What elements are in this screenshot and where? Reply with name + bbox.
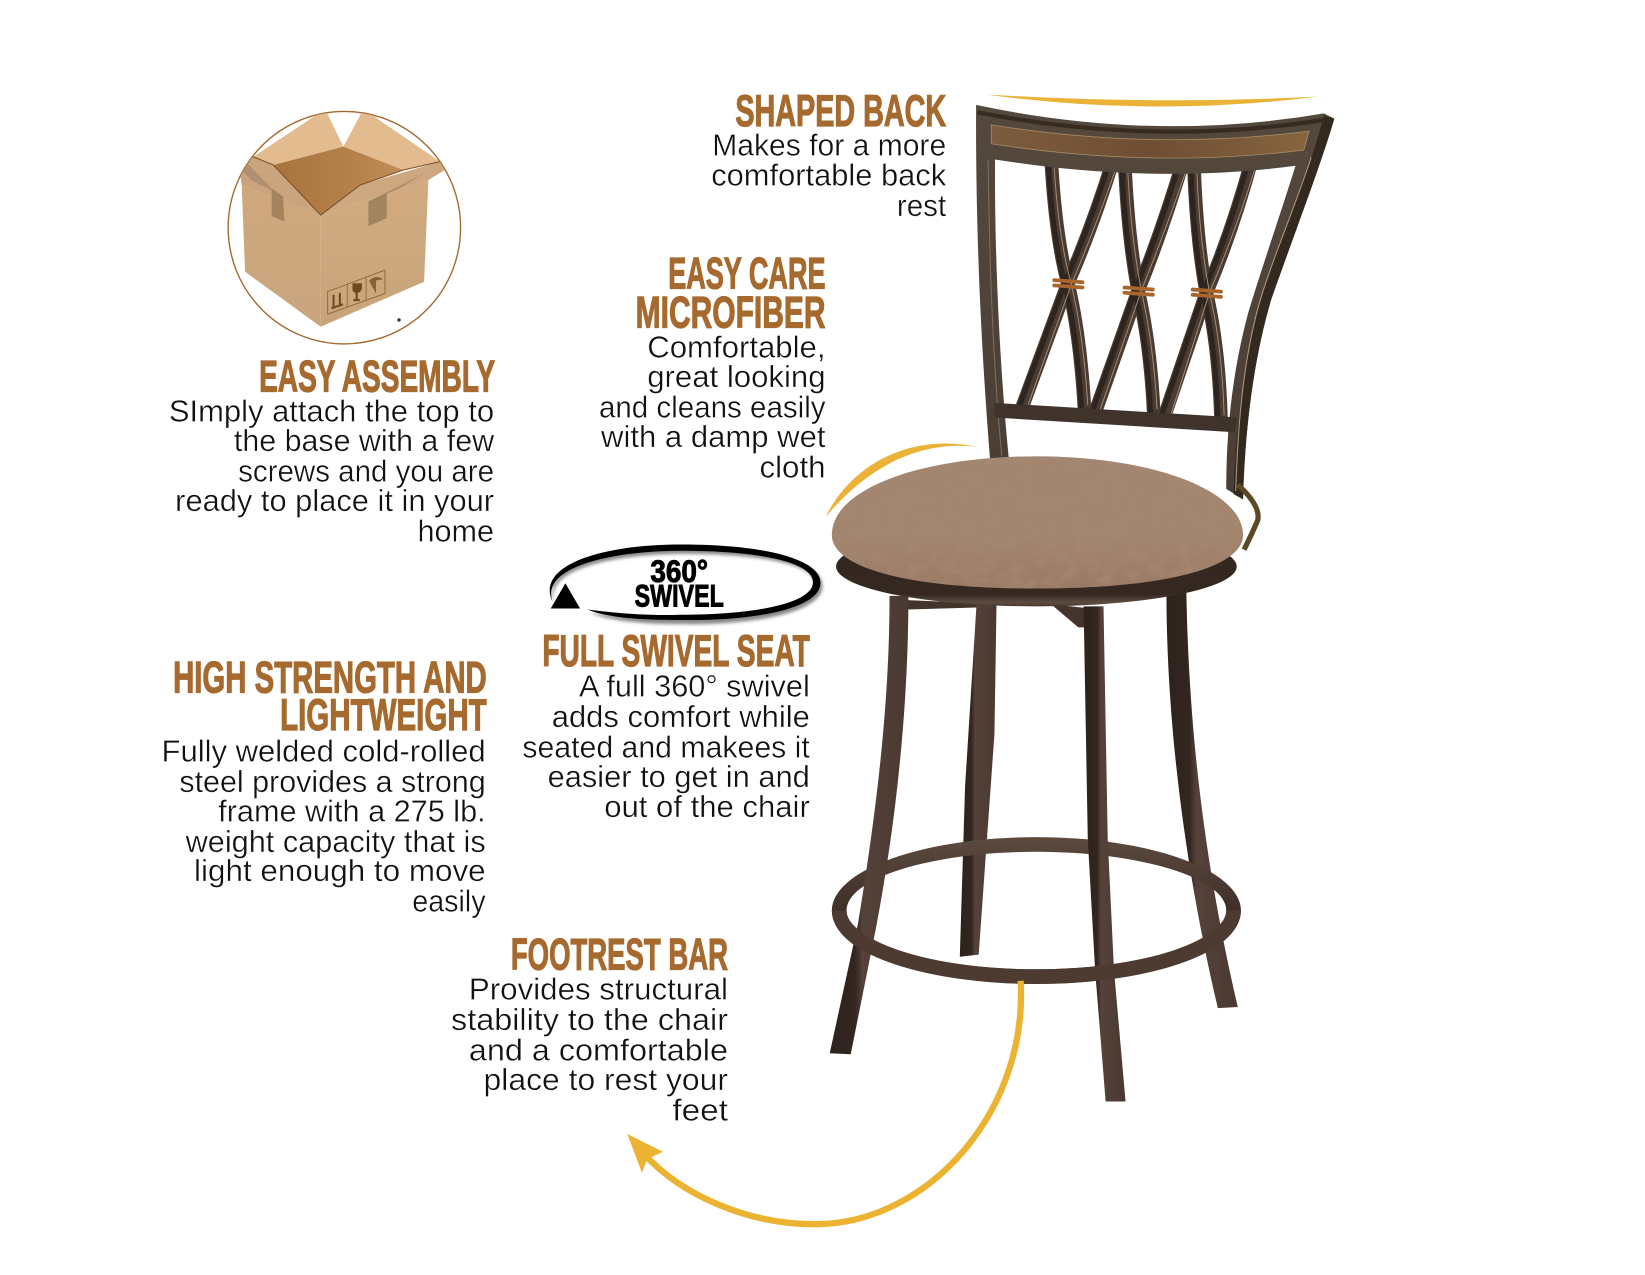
chair back frame — [976, 105, 1334, 499]
text: Easy Care description: Comfortable, — [647, 331, 826, 365]
under-seat brace — [904, 600, 1091, 627]
text: Shaped Back description: Makes for a more — [712, 128, 946, 162]
heading: Easy Care Microfiber — [599, 250, 826, 484]
text: Easy Care description: and cleans easily — [599, 391, 826, 425]
heading: High Strength and Lightweight — [162, 653, 487, 919]
heading: Easy Care Microfiber: EASY CARE — [668, 250, 826, 299]
text: Full Swivel description — [522, 670, 810, 824]
text: Footrest Bar description — [451, 973, 729, 1127]
arrow: microfiber seat curve — [826, 444, 978, 517]
text: Full Swivel description: A full 360° swivel — [579, 670, 810, 704]
heading: Shaped Back — [711, 87, 947, 223]
icon: handling symbols on box — [328, 270, 385, 314]
heading: Footrest Bar — [451, 930, 729, 1127]
triangle arrow — [551, 583, 580, 608]
text: High Strength description: light enough to move — [194, 854, 486, 888]
text: Easy Assembly description — [169, 395, 495, 548]
text: Footrest Bar description: place to rest your — [484, 1063, 728, 1097]
front legs — [830, 596, 1126, 1101]
text: Easy Assembly description: the base with a few — [234, 424, 495, 458]
wood panel — [991, 125, 1309, 158]
rear bracket — [1238, 485, 1258, 550]
text: Easy Assembly description: ready to place it in your — [175, 484, 494, 518]
back legs — [960, 593, 1238, 1008]
text: Easy Care description — [599, 331, 826, 484]
badge: 360 swivel: 360° — [650, 554, 708, 589]
text: Footrest Bar description: feet — [672, 1093, 729, 1127]
text: High Strength description: easily — [412, 885, 486, 919]
text: Footrest Bar description: Provides structural — [469, 973, 728, 1007]
text: Easy Assembly description: home — [417, 514, 494, 548]
heading: Full Swivel Seat — [522, 627, 810, 824]
copper rings — [1054, 280, 1221, 297]
text: Footrest Bar description: and a comfortable — [469, 1034, 728, 1068]
seat cushion — [832, 456, 1243, 589]
heading: Full Swivel Seat: FULL SWIVEL SEAT — [542, 627, 810, 676]
footrest ring front arc — [839, 911, 1234, 977]
heading: Easy Care Microfiber: MICROFIBER — [636, 288, 826, 337]
arrow: footrest curve — [627, 981, 1021, 1224]
text: Shaped Back description: rest — [897, 189, 947, 223]
text: Full Swivel description: seated and makees it — [522, 730, 810, 764]
badge: 360 swivel — [550, 544, 823, 624]
footrest ring — [832, 837, 1241, 984]
splat crosses — [1018, 157, 1255, 420]
text: Easy Care description: with a damp wet — [600, 420, 826, 454]
text: High Strength description: weight capacity that is — [185, 825, 486, 859]
heading: Footrest Bar: FOOTREST BAR — [511, 930, 728, 979]
heading: Shaped Back: SHAPED BACK — [735, 87, 946, 136]
text: Full Swivel description: out of the chair — [604, 790, 810, 824]
heading: High Strength and Lightweight: HIGH STRENGTH AND — [173, 653, 487, 702]
text: Footrest Bar description: stability to the chair — [451, 1003, 728, 1037]
text: Shaped Back description: comfortable back — [711, 159, 947, 193]
text: High Strength description: Fully welded cold-rolled — [162, 735, 486, 769]
lower back rail — [994, 403, 1238, 432]
text: High Strength description: steel provides a strong — [179, 765, 486, 799]
text: High Strength description — [162, 735, 486, 919]
seat rim — [836, 527, 1237, 606]
text: Easy Assembly description: screws and you are — [238, 455, 494, 489]
text: Easy Care description: great looking — [647, 360, 826, 394]
heading: Easy Assembly: EASY ASSEMBLY — [259, 352, 495, 401]
text: Easy Care description: cloth — [759, 450, 826, 484]
badge: 360 swivel: SWIVEL — [635, 578, 724, 613]
heading: Easy Assembly — [169, 352, 495, 548]
heading: High Strength and Lightweight: LIGHTWEIGHT — [280, 691, 487, 740]
arrow: shaped back curve — [986, 94, 1319, 107]
text: Full Swivel description: adds comfort while — [552, 700, 810, 734]
text: Shaped Back description — [711, 128, 947, 223]
text: Easy Assembly description: SImply attach the top to — [169, 395, 494, 429]
stool illustration — [830, 105, 1334, 1101]
icon: cardboard box in circle — [228, 109, 461, 344]
text: High Strength description: frame with a 275 lb. — [218, 794, 486, 828]
text: Full Swivel description: easier to get in and — [548, 760, 810, 794]
